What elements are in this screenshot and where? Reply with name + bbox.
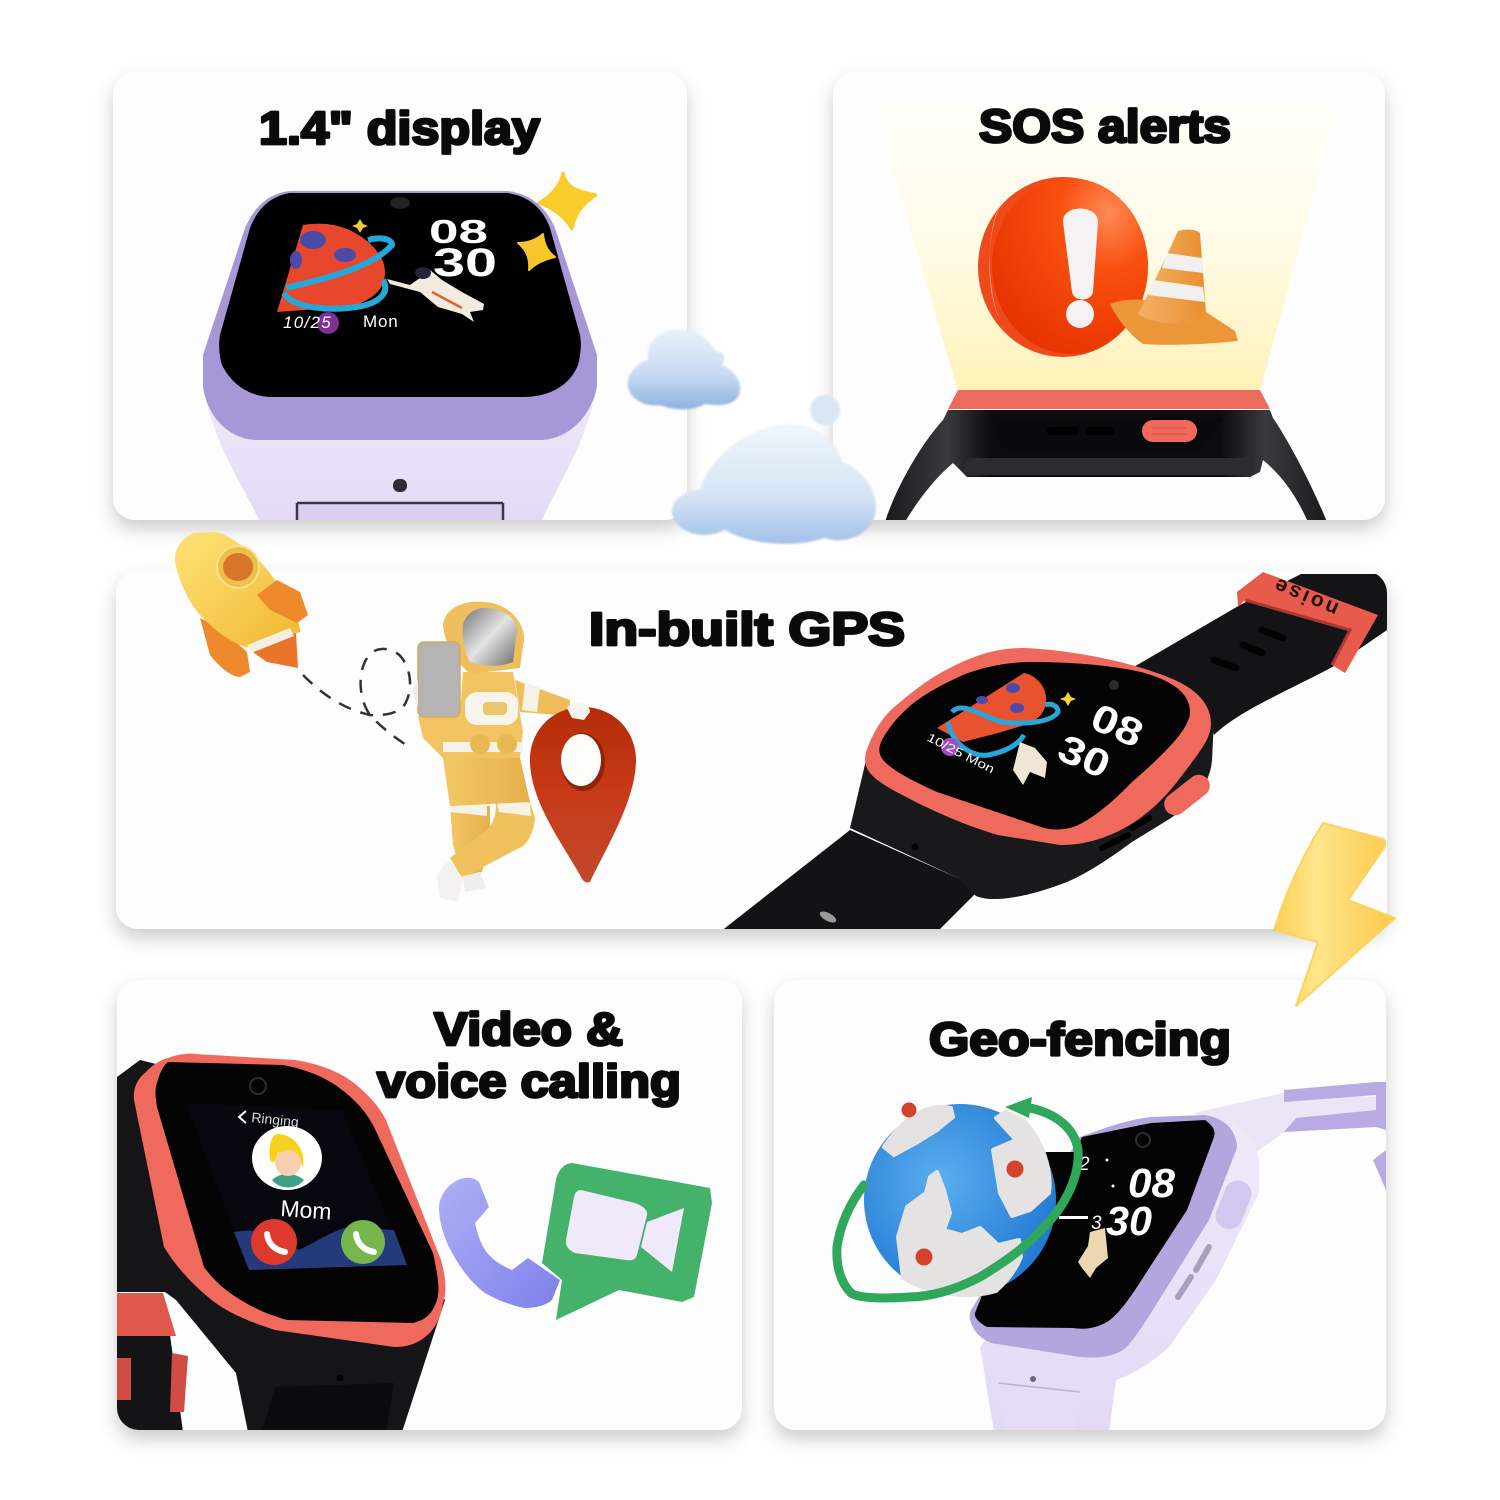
icon: black watch with coral bezel	[720, 572, 1390, 932]
watch face: time: 08	[1128, 1160, 1175, 1206]
watch face: time: 08	[429, 213, 488, 250]
watch face: time	[1058, 706, 1142, 776]
call screen: Ringing	[251, 1109, 300, 1130]
watch face: date	[927, 734, 994, 774]
icon: globe with ring	[837, 1097, 1078, 1298]
icon: gold star small	[518, 234, 555, 270]
icon: phone handset	[439, 1178, 560, 1308]
watch face: time: 30	[1106, 1198, 1152, 1244]
watch face: time	[431, 220, 495, 276]
panel: Video and voice calling	[117, 980, 742, 1432]
heading	[377, 1003, 681, 1107]
heading: 1.4" display	[259, 102, 540, 154]
watch face: planet	[937, 673, 1076, 785]
call screen	[186, 1103, 407, 1270]
watch face: date	[283, 312, 398, 334]
heading: Geo-fencing	[929, 1013, 1231, 1065]
icon: location pin	[530, 703, 636, 883]
light beam	[887, 147, 1326, 390]
icon: black watch with call screen	[117, 1054, 445, 1432]
icon: gold star large	[539, 173, 596, 229]
icon: lightning bolt	[1274, 823, 1395, 1006]
watch face: time	[1059, 1156, 1175, 1236]
watch face: date: 10/25 Mon	[925, 730, 997, 776]
panel: SOS alerts	[833, 72, 1385, 522]
icon: video call bubble	[542, 1163, 712, 1320]
watch face: planet	[277, 219, 392, 312]
heading: Video &	[434, 1003, 623, 1055]
watch face: time: 2	[1078, 1154, 1090, 1175]
watch face: date: Mon	[363, 312, 398, 331]
icon: traffic cone	[1110, 230, 1238, 345]
icon: black watch side view	[885, 390, 1327, 522]
heading: In-built GPS	[589, 603, 905, 655]
panel: Geo-fencing	[774, 980, 1386, 1432]
watch face: astronaut	[387, 267, 484, 322]
watch face: time: 30	[433, 241, 497, 285]
watch face: time: 3	[1091, 1213, 1102, 1234]
icon: astronaut with phone	[412, 602, 570, 902]
call screen: Mom	[280, 1195, 332, 1225]
panel: In-built GPS	[116, 571, 1390, 932]
heading: SOS alerts	[979, 100, 1231, 152]
watch face: time: 08	[1084, 696, 1149, 756]
dashed flight path	[303, 649, 411, 748]
icon: rocket	[175, 532, 308, 677]
icon: small cloud	[628, 329, 740, 409]
panel: 1.4 inch display	[113, 72, 687, 522]
icon: alert ball	[978, 177, 1148, 357]
watch face: astronaut	[1078, 1228, 1108, 1278]
icon: lilac watch with display	[203, 191, 597, 522]
watch face: time: 30	[1051, 727, 1116, 787]
icon: black watch with coral bezel: noise	[1269, 572, 1342, 621]
icon: large cloud	[672, 395, 876, 544]
icon: lilac watch	[970, 1082, 1386, 1432]
heading: voice calling	[377, 1055, 681, 1107]
watch face: date: 10/25	[283, 313, 332, 332]
